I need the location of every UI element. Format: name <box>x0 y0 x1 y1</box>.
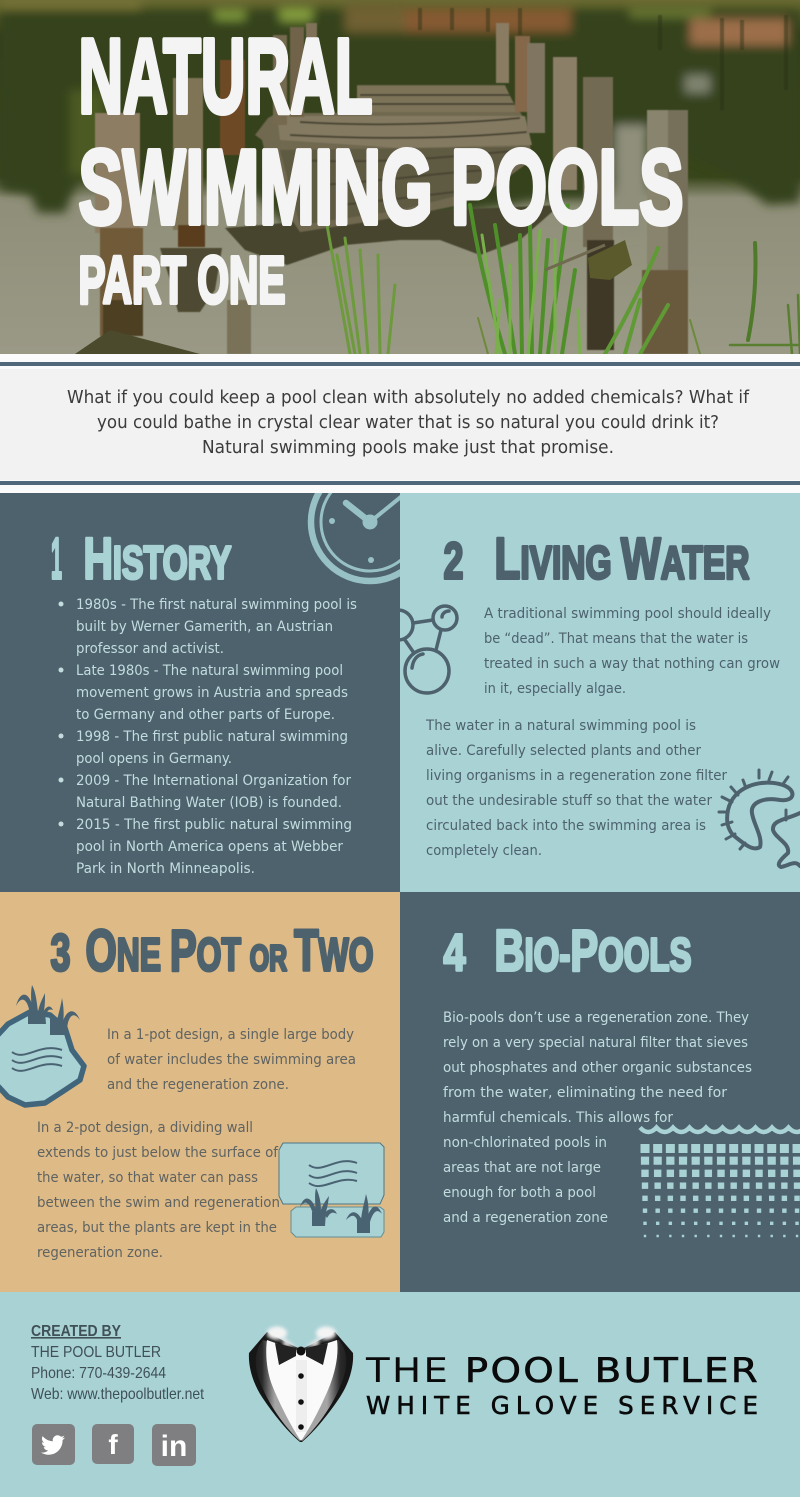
panel: living water <box>383 493 800 892</box>
paragraph: bio-pool description: and a regeneration zone <box>443 1210 608 1226</box>
paragraph: dead water: in it, especially algae. <box>484 681 626 697</box>
paragraph: bio-pool description: from the water, eliminating the need for <box>443 1085 727 1101</box>
tree reflections <box>0 0 800 240</box>
icon: facebook: f <box>108 1429 118 1460</box>
paragraph: 2-pot design: between the swim and regeneration <box>37 1195 280 1211</box>
dark reflection stripes <box>418 8 788 54</box>
history timeline list: 2015 - The first public natural swimming <box>76 817 352 833</box>
paragraph: 2-pot design: the water, so that water can pass <box>37 1170 258 1186</box>
paragraph: 1-pot design: and the regeneration zone. <box>107 1077 289 1093</box>
history timeline list: Park in North Minneapolis. <box>76 861 255 877</box>
intro text: Natural swimming pools make just that promise. <box>202 438 614 458</box>
grass <box>327 205 800 354</box>
icon: twitter <box>32 1424 75 1465</box>
logo: tuxedo <box>249 1326 353 1442</box>
credits text: Web: www.thepoolbutler.net <box>31 1386 204 1403</box>
paragraph: bio-pool description <box>443 1010 752 1226</box>
history timeline list: movement grows in Austria and spreads <box>76 685 348 701</box>
history timeline list: Natural Bathing Water (IOB) is founded. <box>76 795 342 811</box>
paragraph: living water <box>425 718 727 859</box>
heading: 2 Living Water: 2 <box>444 532 464 590</box>
intro text: What if you could keep a pool clean with absolutely no added chemicals? What if <box>67 388 750 408</box>
history timeline list: built by Werner Gamerith, an Austrian <box>76 619 333 635</box>
intro text: you could bathe in crystal clear water that is so natural you could drink it? <box>97 413 719 433</box>
icon: clock <box>308 493 400 584</box>
paragraph: bio-pool description: enough for both a pool <box>443 1185 596 1201</box>
credits text <box>31 1323 204 1403</box>
heading: 3 One Pot or Two: 3 <box>50 924 70 982</box>
logo: wordmark <box>365 1351 760 1420</box>
heading: 1 History: 1 <box>51 526 62 592</box>
paragraph: 2-pot design: extends to just below the surface of <box>37 1145 279 1161</box>
title line: Natural: NATURAL <box>78 18 372 136</box>
panel: footer <box>0 1292 800 1497</box>
history timeline list: 2009 - The International Organization for <box>76 773 351 789</box>
history timeline list: to Germany and other parts of Europe. <box>76 707 335 723</box>
paragraph: 2-pot design <box>37 1120 280 1261</box>
credits text: Phone: 770-439-2644 <box>31 1365 166 1382</box>
paragraph: bio-pool description: out phosphates and other organic substances <box>443 1060 752 1076</box>
heading: 1 History <box>51 526 232 592</box>
history timeline list: professor and activist. <box>76 641 224 657</box>
credits text: THE POOL BUTLER <box>31 1344 161 1361</box>
paragraph: dead water: be “dead”. That means that the water is <box>484 631 748 647</box>
heading: 4 Bio-Pools: BIO-POOLS <box>494 918 692 984</box>
icon: bacteria <box>719 770 800 867</box>
icon: one-pot pond <box>0 985 84 1105</box>
logo: wordmark: WHITE GLOVE SERVICE <box>366 1391 758 1420</box>
icon: linkedin: in <box>161 1430 187 1463</box>
history timeline list: pool opens in Germany. <box>76 751 232 767</box>
paragraph: bio-pool description: rely on a very special natural filter that sieves <box>443 1035 748 1051</box>
paragraph: bio-pool description: Bio-pools don’t use a regeneration zone. They <box>443 1010 749 1026</box>
paragraph: dead water: A traditional swimming pool should ideally <box>484 606 771 622</box>
paragraph: living water: alive. Carefully selected plants and other <box>426 743 701 759</box>
history timeline list: Late 1980s - The natural swimming pool <box>76 663 343 679</box>
credits text: CREATED BY <box>31 1323 121 1340</box>
logo: wordmark: THE POOL BUTLER <box>365 1351 760 1391</box>
history timeline list: pool in North America opens at Webber <box>76 839 343 855</box>
title <box>78 18 684 318</box>
paragraph: 2-pot design: regeneration zone. <box>37 1245 163 1261</box>
dock deck, logs and their reflection <box>225 85 560 265</box>
paragraph: bio-pool description: areas that are not large <box>443 1160 601 1176</box>
heading: 2 Living Water: LIVING WATER <box>494 526 750 592</box>
icon: two-pot pool <box>279 1143 384 1237</box>
intro band <box>0 354 800 493</box>
paragraph: bio-pool description: non-chlorinated pools in <box>443 1135 607 1151</box>
paragraph: living water: out the undesirable stuff so that the water <box>426 793 712 809</box>
heading: 1 History: HISTORY <box>84 526 232 592</box>
heading: 4 Bio-Pools: 4 <box>444 924 466 982</box>
history timeline list: 1980s - The first natural swimming pool is <box>76 597 357 613</box>
history timeline list <box>58 597 357 877</box>
paragraph: living water: completely clean. <box>426 843 542 859</box>
paragraph: living water: circulated back into the swimming area is <box>426 818 706 834</box>
panel: bio-pools <box>400 892 800 1292</box>
dock posts <box>95 23 688 354</box>
heading: 3 One Pot or Two: ONE POT OR TWO <box>86 918 374 984</box>
panel: one pot or two <box>0 892 400 1292</box>
icon: facebook <box>92 1424 134 1464</box>
paragraph: 1-pot design: of water includes the swimming area <box>107 1052 356 1068</box>
paragraph: dead water: treated in such a way that nothing can grow <box>484 656 780 672</box>
paragraph: living water: The water in a natural swimming pool is <box>425 718 696 734</box>
icon: linkedin <box>152 1424 196 1466</box>
history timeline list: 1998 - The first public natural swimming <box>76 729 348 745</box>
paragraph: bio-pool description: harmful chemicals. This allows for <box>443 1110 673 1126</box>
paragraph: 1-pot design: In a 1-pot design, a single large body <box>107 1027 354 1043</box>
paragraph: 2-pot design: areas, but the plants are kept in the <box>37 1220 277 1236</box>
paragraph: 2-pot design: In a 2-pot design, a dividing wall <box>37 1120 253 1136</box>
header photo: wooden dock on a pond <box>0 0 800 354</box>
paragraph: 1-pot design <box>107 1027 356 1093</box>
intro text <box>67 388 750 458</box>
paragraph: living water: living organisms in a regeneration zone filter <box>426 768 727 784</box>
paragraph: dead water <box>484 606 780 697</box>
heading: 4 Bio-Pools <box>444 918 692 984</box>
icon: water surface and fading squares <box>640 1128 800 1236</box>
icon: molecule <box>400 604 459 695</box>
panel: history <box>0 493 400 892</box>
title line: Part One: PART ONE <box>78 243 286 318</box>
